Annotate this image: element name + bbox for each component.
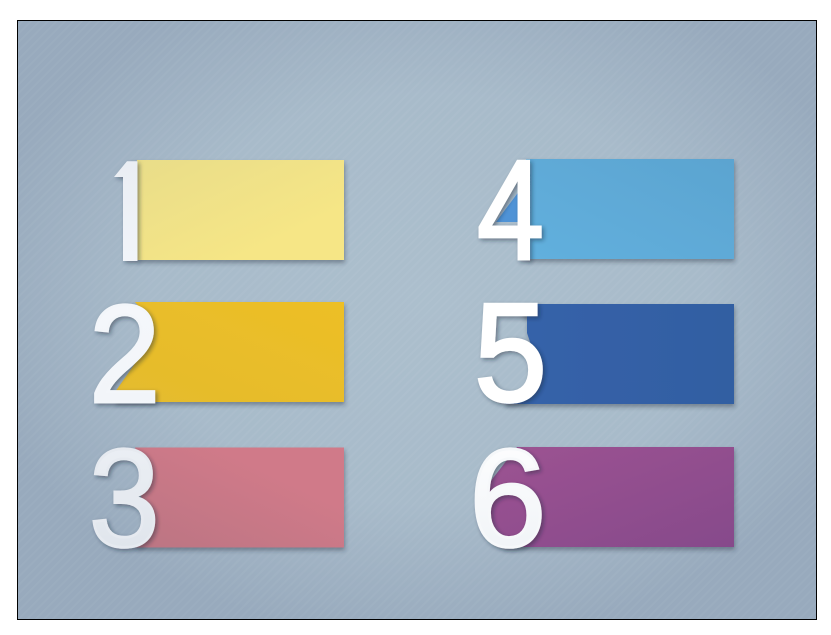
panel 6: purple — [480, 447, 734, 547]
panel 4: light blue — [526, 159, 734, 259]
number 2: 2 — [89, 277, 160, 432]
counter of number 4 — [496, 190, 522, 222]
panel 1: yellow — [137, 160, 344, 260]
panel 3: rose — [135, 448, 344, 548]
panel 5: dark blue — [505, 304, 734, 404]
number 4: 4 — [477, 131, 544, 289]
number 3: 3 — [89, 421, 160, 576]
number 6: 6 — [469, 421, 546, 576]
panel 2: amber — [115, 302, 344, 402]
number 5: 5 — [474, 274, 547, 431]
number 1: 1 — [86, 130, 167, 292]
